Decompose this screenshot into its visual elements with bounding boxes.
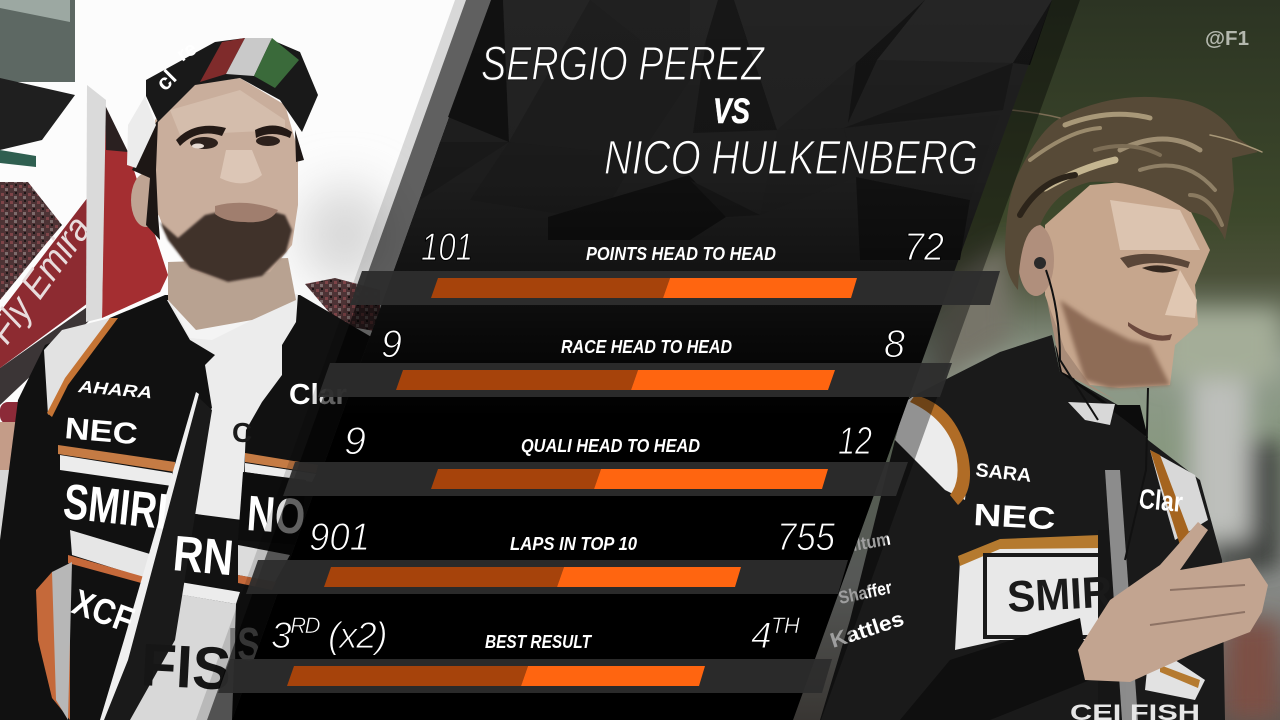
brow and eye	[1120, 254, 1190, 268]
row 2: race head to head	[318, 323, 952, 397]
face	[155, 78, 298, 282]
photo: Nico Hulkenberg	[760, 0, 1280, 720]
nose	[1165, 270, 1197, 318]
cap: cl	[151, 65, 182, 96]
hostess	[0, 402, 26, 540]
value: Perez: RD	[290, 613, 321, 638]
suit logos: Clar	[289, 379, 347, 411]
leg	[36, 568, 70, 720]
value: Perez: 9	[381, 323, 402, 366]
head	[127, 38, 318, 330]
chest panel	[955, 540, 1125, 650]
row band	[218, 659, 832, 693]
value: Perez: 901	[309, 516, 370, 559]
ear	[1018, 224, 1054, 296]
bar: Perez	[287, 666, 528, 686]
panel edge: light band	[196, 0, 466, 720]
value: Hulkenberg: 12	[838, 420, 872, 463]
panel: dark centre	[232, 0, 1052, 720]
nose shadow	[220, 150, 262, 183]
bar: Hulkenberg	[557, 567, 741, 587]
label: BEST RESULT	[485, 632, 593, 652]
low-poly texture	[420, 0, 1052, 260]
bar: Perez	[324, 567, 564, 587]
title	[481, 38, 978, 185]
mouth	[1128, 322, 1172, 341]
crowd	[0, 182, 62, 300]
value: Hulkenberg: 72	[904, 226, 944, 269]
trousers	[118, 592, 236, 720]
value: Perez: 9	[344, 420, 366, 463]
bar: Perez	[431, 278, 670, 298]
row 1: points head to head	[350, 226, 1000, 305]
ear	[131, 173, 161, 227]
right chest	[1150, 450, 1208, 540]
cap	[127, 38, 318, 168]
eyes and brows	[176, 126, 226, 146]
suit logos: AHARA	[76, 377, 153, 402]
racesuit	[0, 294, 385, 720]
suit logos: SMIRI	[61, 473, 170, 540]
name: Hulkenberg: NICO HULKENBERG	[604, 132, 978, 185]
chest stripes	[58, 445, 175, 472]
bar: Hulkenberg	[663, 278, 857, 298]
suit logos: Shaffer	[837, 577, 894, 608]
suit logos	[827, 460, 1200, 720]
bar: Perez	[431, 469, 601, 489]
value: Hulkenberg: 755	[777, 516, 835, 559]
bar: Hulkenberg	[631, 370, 835, 390]
row 4: laps in top 10	[246, 516, 848, 594]
panel edge: gray band	[207, 0, 491, 720]
zip	[100, 395, 212, 720]
value: Hulkenberg: 4	[751, 615, 771, 656]
label: QUALI HEAD TO HEAD	[521, 436, 700, 456]
value: Perez: 3	[271, 615, 290, 656]
label: POINTS HEAD TO HEAD	[586, 244, 776, 264]
head	[1005, 97, 1262, 560]
hand	[1078, 522, 1268, 682]
vs: VS	[713, 92, 750, 131]
suit logos: ultum	[845, 529, 892, 556]
label: RACE HEAD TO HEAD	[561, 337, 732, 357]
suit logos: XCF	[67, 581, 140, 641]
shoulder flash	[895, 395, 968, 500]
suit logos: IS	[228, 618, 260, 670]
beard stubble	[1060, 300, 1170, 388]
suit logos: SMIR	[1006, 568, 1113, 622]
suit logos: Kattles	[827, 607, 907, 653]
row band	[246, 560, 848, 594]
flag and pole	[86, 85, 168, 322]
bar: Hulkenberg	[594, 469, 828, 489]
panel edge: right band	[793, 0, 1080, 720]
row band	[318, 363, 952, 397]
name: Perez: SERGIO PEREZ	[481, 38, 765, 91]
hair	[132, 120, 160, 240]
suit logos: Clar	[1137, 483, 1184, 518]
value: Hulkenberg: TH	[771, 613, 800, 638]
cap: re	[173, 38, 201, 66]
bar: Perez	[396, 370, 638, 390]
blurred background shapes	[930, 240, 1280, 720]
label: LAPS IN TOP 10	[510, 534, 637, 554]
shoulder flash	[44, 318, 110, 415]
value: Hulkenberg: 8	[884, 323, 905, 366]
row band	[350, 271, 1000, 305]
arm stripes	[245, 453, 318, 473]
row 5: best result	[218, 613, 832, 693]
photo: Sergio Perez	[0, 0, 520, 720]
racesuit	[820, 335, 1268, 720]
suit logos: NEC	[973, 497, 1056, 536]
suit logos	[61, 377, 347, 703]
row 3: quali head to head	[283, 420, 908, 496]
centre band	[168, 512, 240, 590]
face	[1045, 180, 1210, 388]
suit logos: NO	[245, 485, 307, 545]
suit logos: C	[232, 417, 252, 448]
suit logos: RN	[171, 525, 236, 586]
value: Perez: 101	[421, 226, 473, 269]
suit logos: NEC	[63, 412, 139, 451]
hair	[1005, 97, 1258, 290]
neck	[1045, 290, 1115, 400]
row band	[283, 462, 908, 496]
bar: Hulkenberg	[521, 666, 705, 686]
sleeve	[900, 618, 1090, 720]
beard	[160, 205, 292, 282]
grandstand building	[0, 0, 75, 167]
suit logos: SARA	[974, 460, 1033, 487]
value: Perez: (x2)	[319, 615, 386, 656]
suit logos: FIS	[139, 631, 233, 703]
undersuit	[167, 294, 298, 520]
watermark: @F1	[1205, 28, 1249, 50]
